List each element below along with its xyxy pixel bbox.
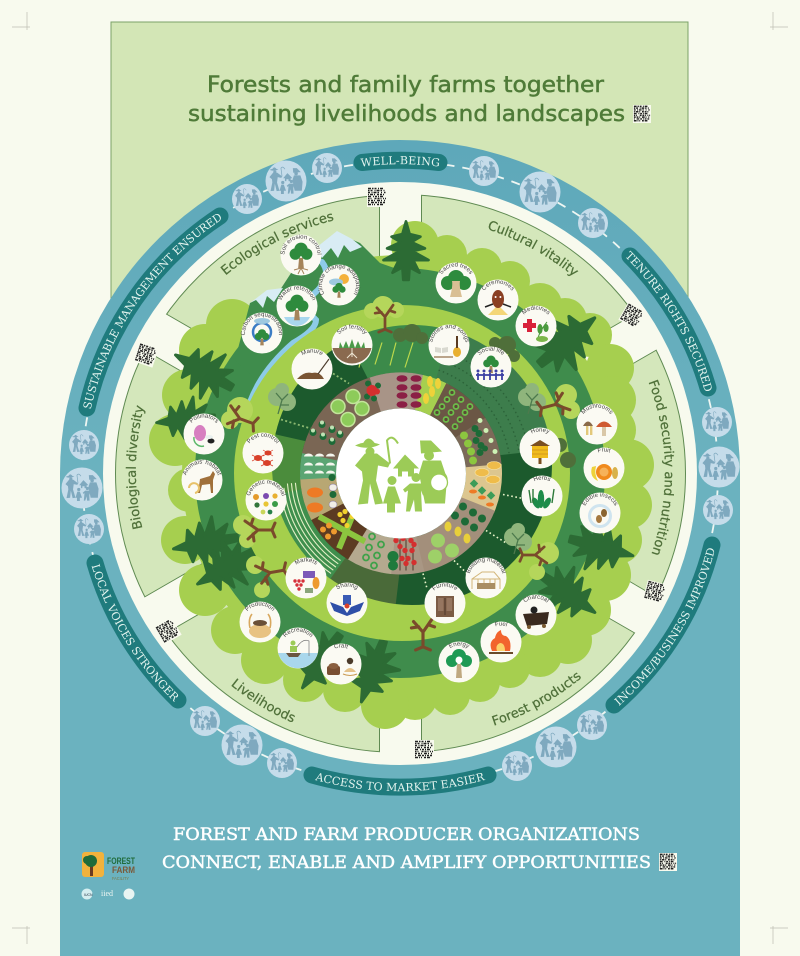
badge: Water retention	[276, 286, 318, 326]
badge: Fruit	[584, 448, 624, 488]
melons and carrots	[469, 462, 501, 506]
cream inner disc	[103, 182, 697, 765]
sector label: Biological diversity: Biological diversity	[126, 405, 146, 530]
pill: sustainable management ensured: SUSTAINABLE MANAGEMENT ENSURED	[83, 214, 221, 409]
badge: Charcoal	[516, 594, 556, 636]
title: sustaining livelihoods and landscapes	[188, 102, 625, 127]
QR codes around the sectors	[133, 187, 667, 760]
badge: Soil erosion control: Soil erosion control	[280, 234, 322, 254]
logo: Forest and Farm Facility	[82, 852, 135, 900]
pill: well-being: WELL-BEING	[360, 156, 440, 166]
partner logos: IUCN	[84, 893, 93, 897]
deciduous trees and bushes	[221, 296, 580, 650]
badge: Recreation	[278, 628, 318, 668]
badge: Herbs: Herbs	[533, 476, 550, 482]
badge: Genetic material: Genetic material	[246, 480, 286, 496]
badge: Craft: Craft	[334, 644, 348, 649]
forest canopy blob	[149, 221, 654, 729]
badge: Edible insects	[580, 492, 620, 534]
carrots and radishes	[307, 474, 337, 512]
sector label: Ecological services: Ecological services	[220, 214, 334, 275]
badge: Pest control: Pest control	[246, 433, 280, 444]
badge: Recreation: Recreation	[282, 628, 312, 638]
beets	[396, 375, 422, 408]
pill: access to market easier: ACCESS TO MARKET EASIER	[314, 773, 486, 792]
title: Forests and family farms together	[207, 73, 605, 98]
sector label: Livelihoods: Livelihoods	[231, 678, 295, 722]
badge: Stories and songs	[428, 324, 470, 366]
badge: Sacred trees: Sacred trees	[439, 262, 472, 274]
mountains and mid green forest ring	[195, 231, 605, 678]
badge: Furniture: Furniture	[432, 582, 458, 590]
badge: Furniture	[424, 582, 466, 624]
badge: Production	[240, 601, 280, 642]
lettuces	[331, 390, 369, 426]
green rings crop	[434, 390, 472, 429]
badge: Ceremonies	[478, 279, 518, 320]
badge: Honey	[520, 428, 560, 468]
badge: Manure	[292, 348, 332, 390]
leafy plants, potatoes, lettuce	[428, 502, 486, 564]
badge: Sacred trees	[436, 262, 476, 304]
family illustration	[355, 438, 448, 512]
badge: Mushrooms	[576, 404, 618, 444]
badge: Charcoal: Charcoal	[524, 595, 550, 602]
badge: Herbs	[522, 476, 562, 516]
top panel with title	[111, 22, 688, 372]
sector label: Forest products: Forest products	[492, 672, 581, 726]
ring of producer pills	[78, 152, 720, 796]
logo: Forest and Farm Facility: FACILITY	[112, 876, 129, 881]
cabbages	[310, 420, 344, 445]
badge: Medicines	[516, 305, 556, 346]
outer teal ring	[60, 140, 740, 807]
badge: Production: Production	[244, 601, 274, 611]
badge: Carbon sequestration: Carbon sequestration	[240, 313, 282, 336]
badge: Sharing: Sharing	[336, 582, 358, 590]
ring crop	[363, 534, 384, 568]
logo: Forest and Farm Facility: FARM	[112, 865, 135, 875]
badge: Energy	[438, 642, 480, 682]
badge: Medicines: Medicines	[522, 305, 550, 314]
white mounds	[304, 454, 335, 474]
partner logos: iied	[101, 889, 113, 898]
fir trees	[155, 221, 639, 711]
badge: Mushrooms: Mushrooms	[580, 404, 612, 414]
sector label: Food security and nutrition: Food security and nutrition	[648, 380, 674, 555]
tomatoes	[388, 536, 417, 570]
badge: Fuel: Fuel	[494, 622, 508, 626]
bottom statement: FOREST AND FARM PRODUCER ORGANIZATIONS	[173, 825, 640, 845]
pill: income business improved: INCOME/BUSINESS IMPROVED	[614, 548, 714, 706]
bottom statement	[162, 825, 651, 873]
river	[250, 262, 326, 402]
badge: Pollinators: Pollinators	[189, 414, 218, 423]
logo: Forest and Farm Facility: FOREST	[107, 856, 135, 866]
badge: Climate change adaptation: Climate change adaptation	[318, 264, 360, 295]
badge: Markets	[286, 557, 326, 598]
dashed connector line	[82, 162, 718, 786]
badge: Soil fertility: Soil fertility	[337, 324, 367, 334]
badge: Building material	[466, 558, 506, 598]
garden plot with cross paths	[319, 509, 365, 548]
badge: Carbon sequestration	[240, 312, 282, 354]
crop field ring	[286, 359, 516, 588]
pill: tenure rights secured: TENURE RIGHTS SECURED	[626, 250, 712, 391]
badge: Water retention: Water retention	[278, 286, 316, 300]
badge: Soil erosion control	[280, 234, 322, 276]
partner logos	[82, 888, 134, 900]
badge: Markets: Markets	[294, 557, 318, 564]
field lines on farm land	[231, 304, 571, 643]
badge: Sharing	[326, 582, 368, 624]
badge: Craft	[320, 644, 362, 684]
badge: Animals' habitat	[182, 459, 222, 500]
badge: Edible insects: Edible insects	[582, 492, 618, 506]
badge: Soil fertility	[332, 324, 372, 366]
pears	[423, 376, 441, 404]
badge: Ceremonies: Ceremonies	[482, 280, 514, 290]
light green ring	[234, 305, 570, 641]
badge: Animals' habitat: Animals' habitat	[182, 459, 222, 476]
badge: Pest control	[242, 432, 284, 474]
six outcome sectors	[115, 194, 686, 752]
bottom teal panel	[60, 473, 740, 956]
title	[188, 73, 625, 127]
badge: Honey: Honey	[530, 428, 550, 434]
pill: well-being	[354, 152, 448, 171]
snow caps	[317, 231, 362, 258]
badge: Social life	[470, 346, 512, 388]
sector label: Cultural vitality: Cultural vitality	[488, 221, 578, 276]
badge: Energy: Energy	[448, 642, 470, 648]
badges	[182, 234, 624, 684]
QR code: title	[633, 105, 651, 123]
badge: Building material: Building material	[466, 558, 506, 574]
QR code: bottom statement	[659, 853, 677, 871]
badge: Social life: Social life	[477, 346, 506, 357]
pill: local voices stronger: LOCAL VOICES STRONGER	[92, 564, 178, 702]
clover and beans crop	[460, 418, 498, 464]
family icons on the ring	[62, 153, 740, 781]
bottom statement: CONNECT, ENABLE AND AMPLIFY OPPORTUNITIES	[162, 853, 651, 873]
centre white disc	[336, 408, 466, 538]
badge: Fuel	[480, 622, 522, 662]
badge: Stories and songs: Stories and songs	[428, 324, 470, 343]
badge: Manure: Manure	[301, 349, 322, 356]
farm land ring	[314, 367, 510, 563]
badge: Genetic material	[246, 480, 286, 520]
badge: Fruit: Fruit	[598, 448, 611, 452]
red flower	[364, 380, 381, 402]
badge: Pollinators	[184, 414, 224, 454]
